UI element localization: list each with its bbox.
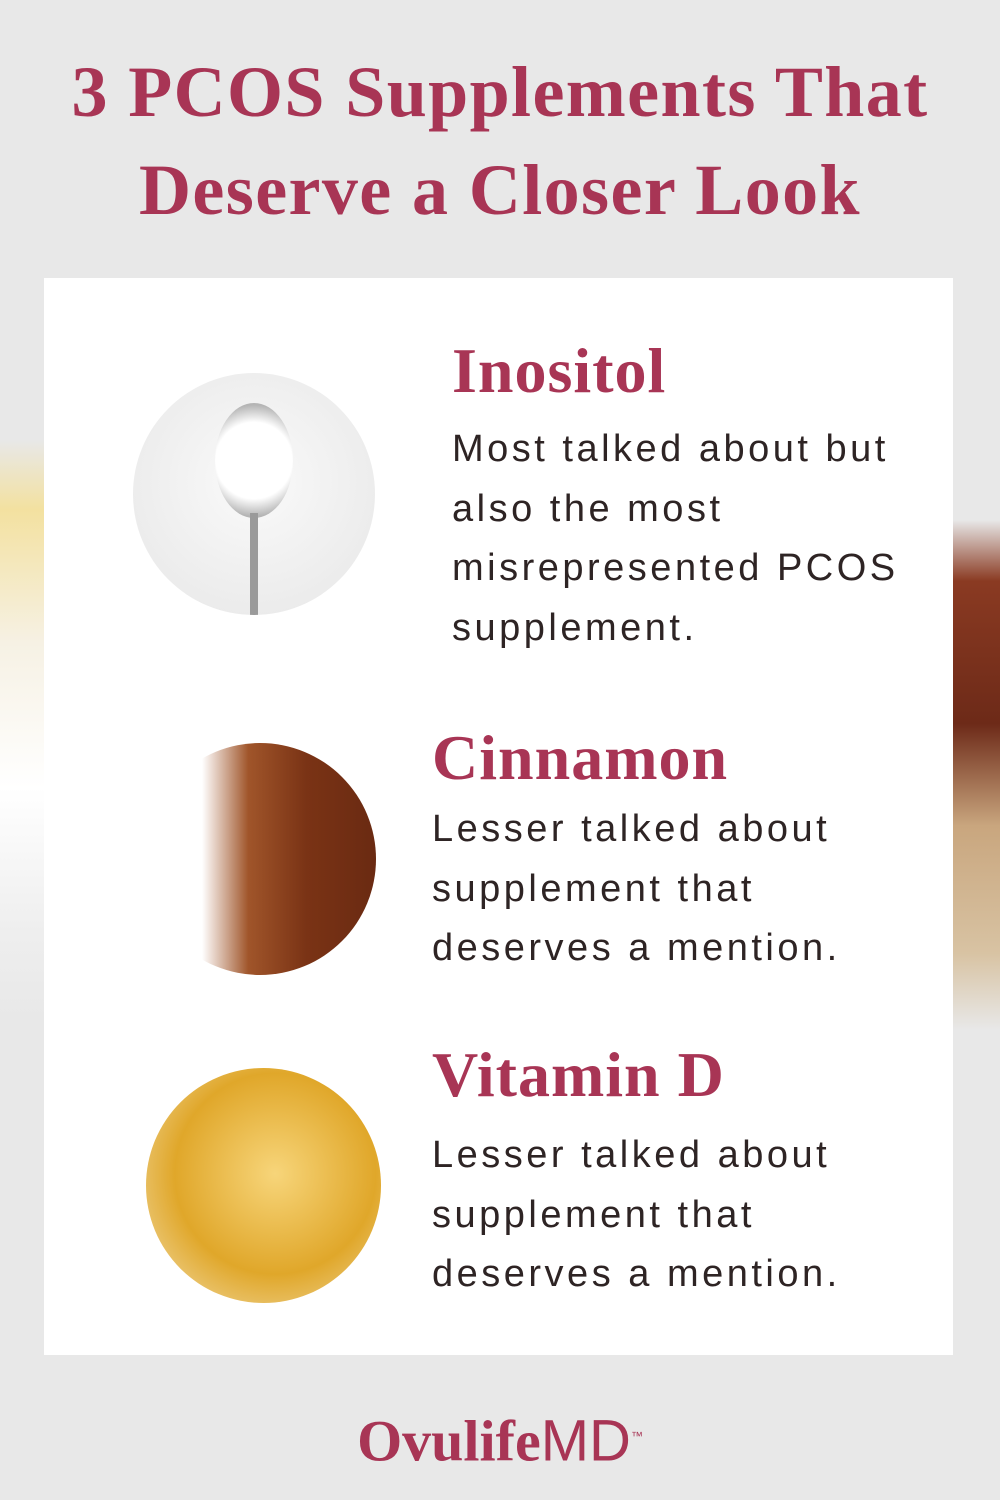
text: inositol description (452, 428, 899, 648)
title (71, 52, 929, 230)
image: vitamin D capsules (146, 1068, 381, 1303)
text: cinnamon description: Lesser talked about (432, 808, 830, 850)
text: vitamin D description: supplement that (432, 1194, 755, 1236)
image: inositol spoon (133, 373, 375, 615)
decoration: right powder (953, 520, 1000, 1030)
text: inositol description: Most talked about but (452, 428, 889, 470)
text: cinnamon description (432, 808, 841, 969)
text: inositol description: also the most (452, 488, 724, 530)
heading: Cinnamon: Cinnamon (432, 722, 728, 793)
panel: supplements (44, 278, 953, 1355)
text: cinnamon description: deserves a mention. (432, 927, 841, 969)
text: vitamin D description: Lesser talked about (432, 1134, 830, 1176)
text: inositol description: misrepresented PCOS (452, 547, 899, 589)
text: vitamin D description (432, 1134, 841, 1295)
logo: OvulifeMD™ (357, 1408, 643, 1473)
image: cinnamon sticks (144, 743, 376, 975)
decoration: left pills (0, 440, 44, 1020)
text: vitamin D description: deserves a mention. (432, 1253, 841, 1295)
title: 3 PCOS Supplements That (71, 52, 929, 132)
text: inositol description: supplement. (452, 606, 698, 648)
title: Deserve a Closer Look (139, 150, 861, 230)
text: cinnamon description: supplement that (432, 868, 755, 910)
heading: Inositol: Inositol (452, 335, 666, 406)
heading: Vitamin D: Vitamin D (432, 1039, 725, 1110)
